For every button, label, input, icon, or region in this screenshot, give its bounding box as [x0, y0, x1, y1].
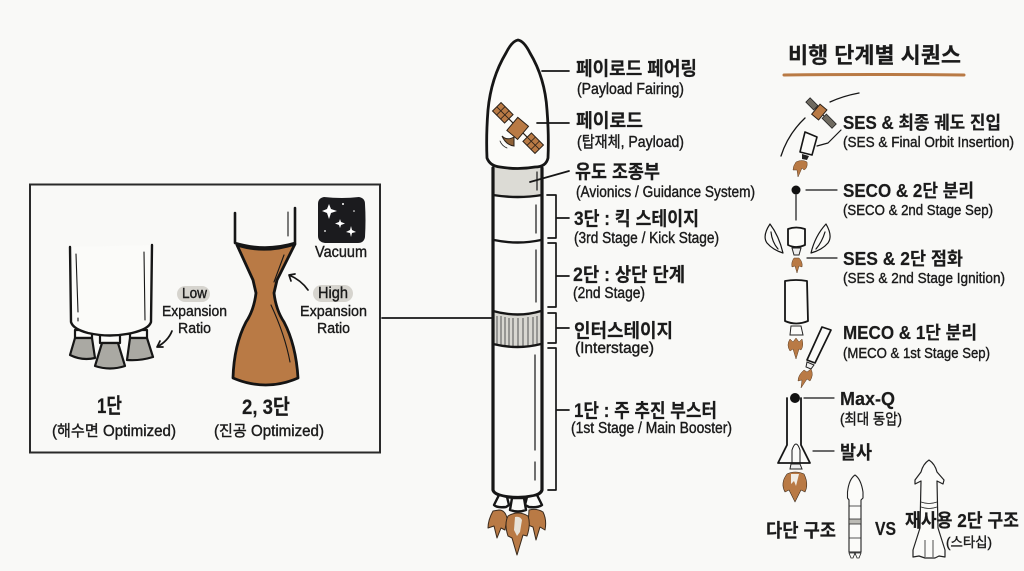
- main rocket diagram: [487, 40, 548, 555]
- engines: [494, 495, 542, 512]
- caption: second and third stage: [214, 396, 324, 440]
- label: avionics: [575, 162, 755, 201]
- flames: [488, 509, 546, 555]
- heading: flight sequence: 비행 단계별 시퀀스: [788, 43, 961, 68]
- label: interstage: [574, 320, 673, 357]
- label: reusable second stage: [905, 510, 1019, 550]
- label: first stage: 1단 : 주 추진 부스터: [574, 400, 717, 422]
- label: MECO and first stage separation: MECO & 1단 분리: [843, 323, 977, 343]
- caption: first stage: 1단: [97, 395, 122, 418]
- label: first stage: [571, 400, 732, 437]
- label: third stage: [574, 208, 719, 247]
- label: MECO and first stage separation: (MECO & 1st Stage Sep): [843, 345, 990, 362]
- label: second stage: 2단 : 상단 단계: [573, 264, 685, 286]
- sequence illustration: launch vehicle and Max-Q: [778, 393, 834, 502]
- label: Vacuum: Vacuum: [315, 244, 367, 261]
- label: second stage: (2nd Stage): [573, 285, 645, 302]
- label: reusable second stage: (스타십): [946, 535, 992, 550]
- label: launch: 발사: [840, 442, 872, 463]
- label: SES and final orbit: SES & 최종 궤도 진입: [843, 113, 1001, 133]
- label: MECO and first stage separation: [843, 323, 990, 362]
- icon: reusable starship: [913, 460, 945, 558]
- caption: first stage: (해수면 Optimized): [52, 422, 176, 440]
- label: SES and final orbit: [843, 113, 1014, 151]
- icon: satellite payload: [493, 103, 543, 153]
- label: payload fairing: (Payload Fairing): [577, 81, 684, 98]
- panel: nozzle expansion comparison: [30, 184, 380, 452]
- label: interstage: (Interstage): [575, 340, 654, 357]
- label: SECO and second stage separation: [843, 181, 993, 219]
- rocket body: [493, 168, 542, 498]
- caption: second and third stage: 2, 3단: [242, 396, 290, 419]
- label: low expansion ratio: Low: [182, 285, 207, 302]
- label: SECO and second stage separation: (SECO & 2nd Stage Sep): [843, 202, 993, 219]
- label: third stage: (3rd Stage / Kick Stage): [574, 230, 719, 247]
- label: avionics: 유도 조종부: [575, 162, 660, 183]
- label: high expansion ratio: Ratio: [317, 320, 350, 337]
- label: high expansion ratio: High: [318, 285, 348, 302]
- label: multi-stage: 다단 구조: [766, 520, 836, 541]
- sequence illustration: second stage ignition: [765, 224, 837, 273]
- label: VS: VS: [875, 519, 896, 539]
- label: payload: [576, 110, 684, 151]
- sequence marker: SECO: [792, 186, 837, 220]
- label: SES and second stage ignition: (SES & 2nd Stage Ignition): [843, 270, 1005, 287]
- icon: first-stage engine section: [70, 245, 153, 368]
- caption: second and third stage: (진공 Optimized): [214, 422, 324, 440]
- label: payload fairing: 페이로드 페어링: [576, 58, 697, 80]
- label: SECO and second stage separation: SECO & 2단 분리: [843, 181, 974, 201]
- arrow: high expansion: [289, 274, 308, 290]
- arrow: low expansion: [157, 331, 172, 347]
- icon: multi-stage rocket: [848, 475, 863, 558]
- label: SES and second stage ignition: SES & 2단 점화: [843, 249, 963, 269]
- caption: first stage: [52, 395, 176, 440]
- label: high expansion ratio: [300, 285, 367, 337]
- label: Max-Q: [840, 389, 902, 428]
- label: third stage: 3단 : 킥 스테이지: [574, 208, 699, 230]
- label: first stage: (1st Stage / Main Booster): [571, 420, 732, 437]
- payload fairing: [487, 40, 548, 168]
- icon: vacuum starfield: [318, 197, 366, 243]
- label: low expansion ratio: Ratio: [178, 320, 211, 337]
- label: high expansion ratio: Expansion: [300, 303, 367, 320]
- label: payload: 페이로드: [576, 110, 643, 132]
- label: Max-Q: Max-Q: [840, 389, 895, 409]
- callouts: main rocket leaders and brackets: [530, 71, 569, 490]
- label: payload fairing: [576, 58, 697, 98]
- label: payload: (탑재체, Payload): [577, 133, 684, 151]
- label: interstage: 인터스테이지: [574, 320, 673, 342]
- connector: panel to rocket: [382, 317, 492, 319]
- label: second stage: [573, 264, 685, 302]
- label: SES and second stage ignition: [843, 249, 1005, 287]
- label: low expansion ratio: Expansion: [162, 303, 227, 320]
- label: Max-Q: (최대 동압): [840, 411, 902, 428]
- sequence illustration: first stage separation: [785, 280, 831, 388]
- comparison: multi-stage versus reusable: [766, 460, 1019, 558]
- label: avionics: (Avionics / Guidance System): [576, 184, 755, 201]
- sequence illustration: orbit insertion: [781, 93, 859, 177]
- label: low expansion ratio: [162, 285, 227, 337]
- icon: vacuum-optimized nozzle: [233, 208, 298, 385]
